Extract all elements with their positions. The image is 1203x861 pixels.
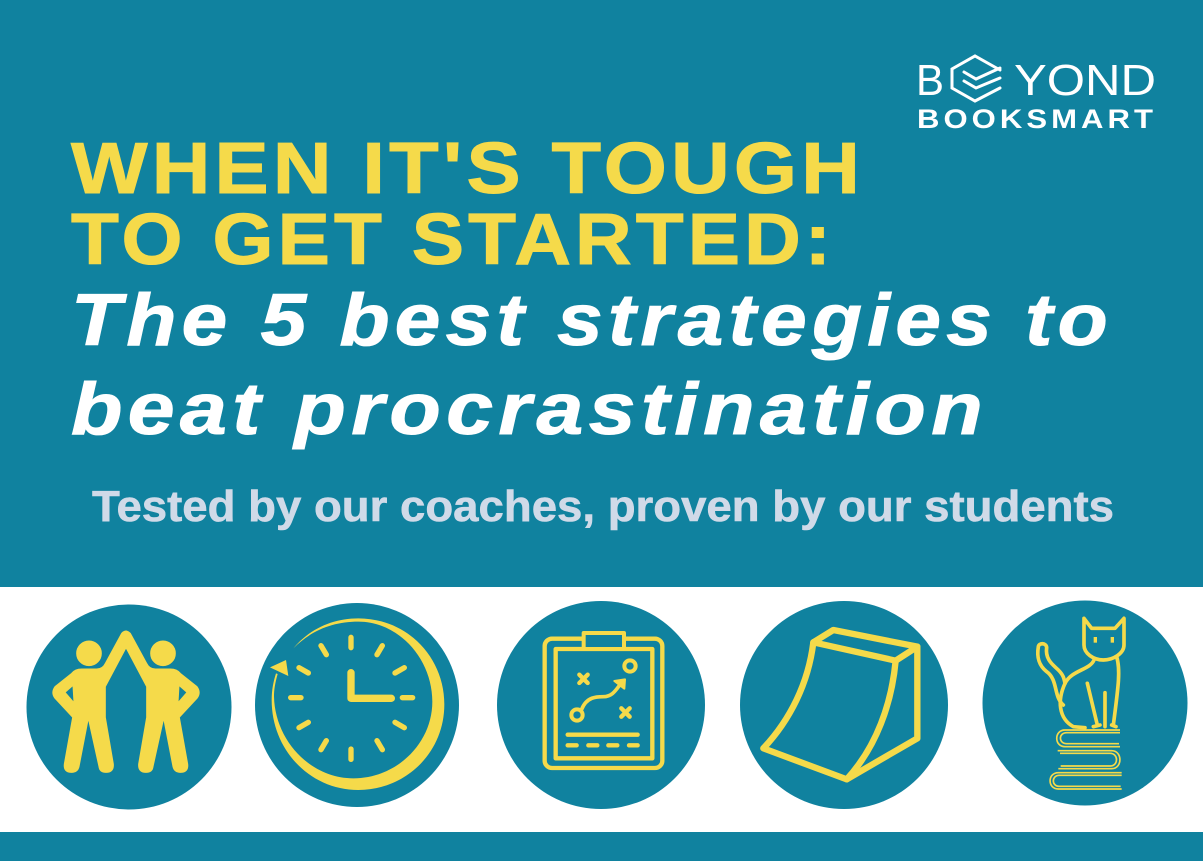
title: yellow heading — [71, 129, 864, 280]
logo: Beyond BookSmart — [916, 56, 1157, 134]
icon: two people high five — [26, 604, 232, 810]
header panel background — [0, 0, 1203, 587]
tagline: Tested by our coaches, proven by our students — [92, 482, 1114, 531]
icon: ramp — [740, 601, 948, 809]
icon: clock with circular arrow — [255, 603, 459, 807]
title: yellow heading: WHEN IT'S TOUGH — [71, 129, 864, 209]
subtitle: italic white heading — [71, 280, 1113, 450]
icon band background — [0, 587, 1203, 832]
footer strip — [0, 832, 1203, 861]
logo: Beyond BookSmart: BOOKSMART — [917, 104, 1157, 134]
icon: cat on stack of books — [982, 600, 1188, 806]
logo: Beyond BookSmart: YOND — [1014, 56, 1156, 105]
logo: Beyond BookSmart: B — [916, 56, 944, 105]
title: yellow heading: TO GET STARTED: — [71, 200, 835, 280]
icon: logo hexagon with book layers — [952, 56, 1000, 101]
subtitle: italic white heading: beat procrastination — [71, 369, 988, 450]
book stack — [1050, 730, 1122, 789]
cat outline — [1038, 618, 1124, 728]
icon: strategy clipboard — [497, 601, 705, 809]
subtitle: italic white heading: The 5 best strategies to — [71, 280, 1113, 361]
